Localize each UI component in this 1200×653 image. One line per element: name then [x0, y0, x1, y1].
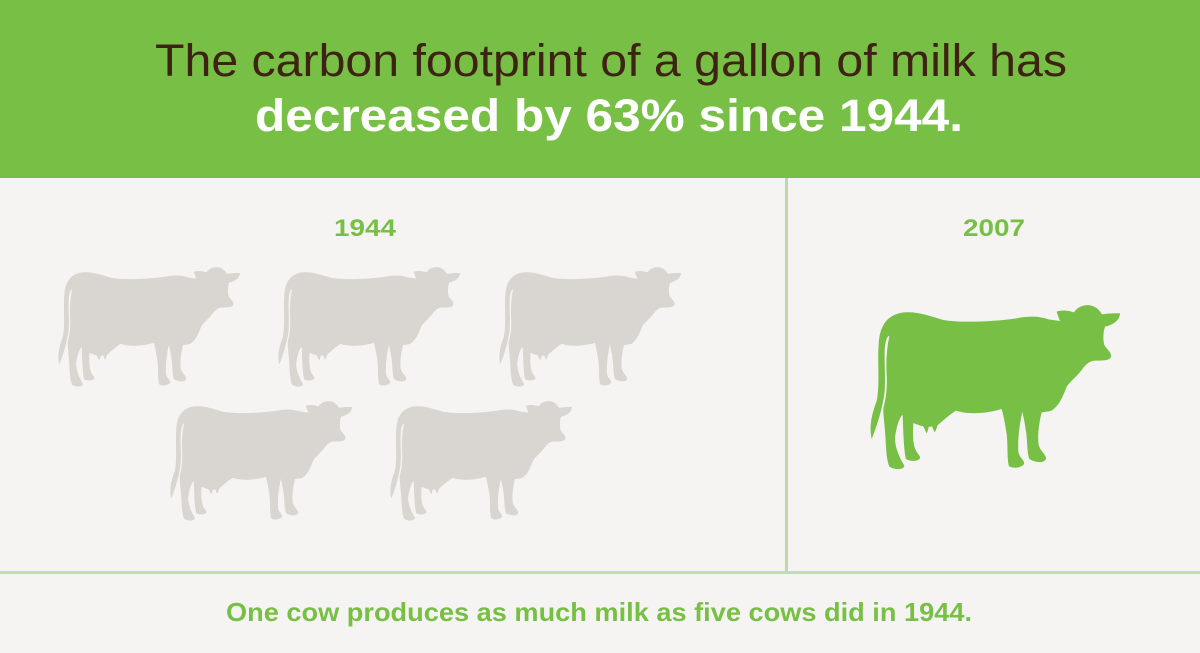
panel: 2007 [871, 215, 1120, 469]
icon: gray cow 4 [170, 401, 352, 521]
icon: gray cow 1 [58, 267, 240, 387]
year label 2007: 2007 [963, 215, 1025, 242]
footer caption: One cow produces as much milk as five cows did in 1944. [226, 597, 972, 627]
horizontal panel divider [0, 571, 1200, 574]
vertical panel divider [785, 178, 788, 572]
year label 1944: 1944 [334, 215, 397, 242]
icon: gray cow 2 [278, 267, 460, 387]
icon: gray cow 5 [390, 401, 572, 521]
title line 1: The carbon footprint of a gallon of milk has [155, 35, 1067, 86]
icon: gray cow 3 [499, 267, 681, 387]
title line 2: decreased by 63% since 1944. [255, 90, 963, 141]
panel: 1944 [58, 215, 681, 521]
icon: green cow [871, 305, 1120, 469]
header banner [0, 0, 1200, 178]
